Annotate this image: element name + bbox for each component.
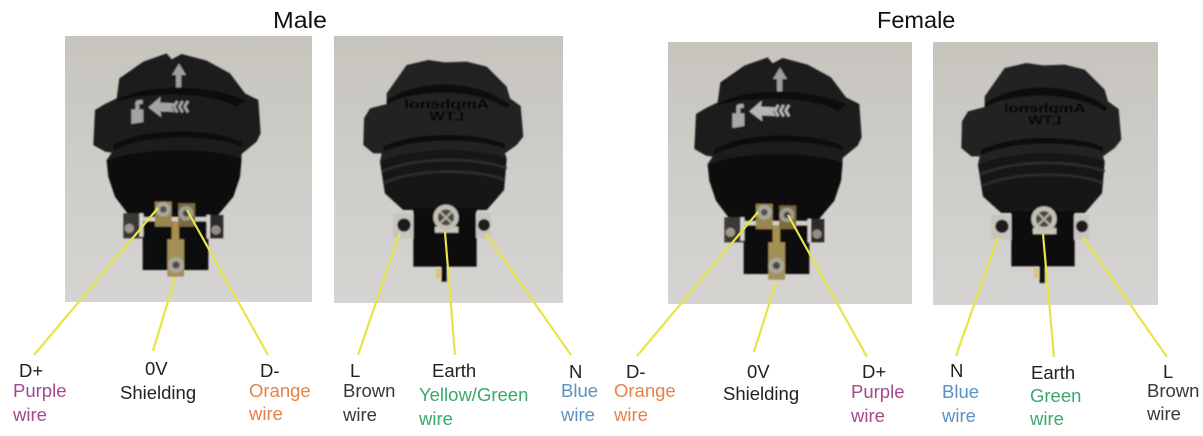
label: male D+ purple wire: wire [12, 404, 47, 425]
label: female N blue wire: N [950, 360, 963, 381]
label: male L brown wire: Brown [343, 380, 395, 401]
label: male D- orange wire: Orange [249, 380, 311, 401]
label: male D- orange wire: wire [248, 403, 283, 424]
label: female L brown wire: wire [1146, 403, 1181, 424]
label: female D+ purple wire: wire [850, 405, 885, 426]
text: mirrored maker mark: Amphenol [404, 97, 489, 111]
label: male N blue wire [560, 361, 598, 425]
label: female L brown wire: Brown [1147, 380, 1199, 401]
label: male Earth yellow/green wire: Yellow/Green [419, 384, 528, 405]
label: female D- orange wire: wire [613, 404, 648, 425]
label: female D- orange wire: D- [626, 361, 646, 382]
label: male L brown wire: L [350, 360, 360, 381]
callout lines: male [34, 208, 571, 355]
label: female N blue wire [941, 360, 979, 426]
label: male L brown wire [342, 360, 395, 425]
label: female N blue wire: wire [941, 405, 976, 426]
text: mirrored maker mark: LTW [1028, 114, 1061, 128]
icon: connector, front view [93, 53, 261, 277]
text: mirrored maker mark: LTW [429, 110, 464, 124]
label: male 0V shielding: Shielding [120, 382, 196, 403]
panel: male connector rear photo [334, 36, 563, 303]
title: Female: Female [877, 7, 955, 33]
panel: female connector front photo [668, 42, 912, 304]
icon: connector, front view [694, 57, 862, 280]
label: male N blue wire: Blue [561, 380, 598, 401]
label: female 0V shielding: 0V [747, 361, 770, 382]
label: female L brown wire: L [1163, 361, 1173, 382]
title: Male: Male [273, 7, 327, 33]
icon: connector, rear view [961, 63, 1121, 283]
label: male N blue wire: N [569, 361, 582, 382]
panel: male connector front photo [65, 36, 312, 302]
label: male Earth yellow/green wire: Earth [432, 360, 476, 381]
text: mirrored maker mark [1004, 101, 1085, 128]
callout lines: female [637, 212, 1167, 357]
label: female Earth green wire [1029, 362, 1081, 429]
label: male N blue wire: wire [560, 404, 595, 425]
label: female L brown wire [1146, 361, 1199, 424]
label: male D- orange wire: D- [260, 360, 280, 381]
label: female D+ purple wire: Purple [851, 381, 904, 402]
label: male Earth yellow/green wire [418, 360, 528, 429]
label: female D+ purple wire [850, 361, 904, 426]
label: female Earth green wire: wire [1029, 408, 1064, 429]
label: male L brown wire: wire [342, 404, 377, 425]
label: female 0V shielding [723, 361, 799, 404]
label: male 0V shielding: 0V [145, 358, 168, 379]
icon: connector, rear view [363, 60, 523, 282]
text: mirrored maker mark [404, 97, 489, 124]
label: female N blue wire: Blue [942, 381, 979, 402]
label: male 0V shielding [120, 358, 196, 403]
label: female 0V shielding: Shielding [723, 383, 799, 404]
label: male D+ purple wire: Purple [13, 380, 66, 401]
label: female D+ purple wire: D+ [862, 361, 886, 382]
label: female Earth green wire: Earth [1031, 362, 1075, 383]
label: male D+ purple wire: D+ [19, 360, 43, 381]
label: male D+ purple wire [12, 360, 66, 425]
label: female D- orange wire: Orange [614, 380, 676, 401]
label: female Earth green wire: Green [1030, 385, 1081, 406]
label: male D- orange wire [248, 360, 311, 424]
label: female D- orange wire [613, 361, 676, 425]
panel: female connector rear photo [933, 42, 1158, 305]
label: male Earth yellow/green wire: wire [418, 408, 453, 429]
text: mirrored maker mark: Amphenol [1004, 101, 1085, 115]
